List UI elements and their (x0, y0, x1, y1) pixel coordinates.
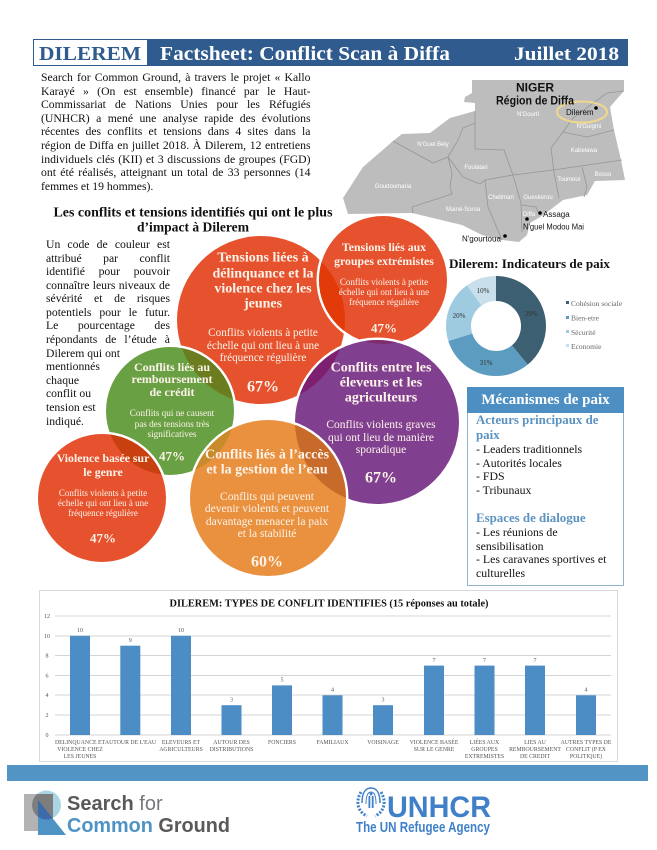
category labels: AUTRES TYPES DE (561, 740, 612, 746)
bubble: éleveurs et agriculteurs: agriculteurs (345, 390, 418, 406)
bubble: accès et gestion de l'eau: et la stabilité (238, 528, 296, 540)
colour code explanation text: répondants de l’étude à (46, 333, 170, 346)
panel text: Acteurs principaux de (476, 413, 598, 427)
bubble: accès et gestion de l'eau: et la gestion de l’eau (206, 462, 328, 478)
intro paragraph: Karayé » (On est ensemble) financé par le Haut- (41, 85, 310, 98)
logo: Search for Common Ground (24, 790, 229, 835)
bubble: groupes extrémistes: Conflits violents à petite (340, 277, 428, 287)
category labels: SUR LE GENRE (414, 747, 455, 753)
colour code explanation text: tension est (46, 401, 96, 414)
bubble: remboursement de crédit: de crédit (150, 385, 194, 399)
colour code explanation text: indiqué. (46, 415, 84, 428)
panel text: paix (476, 428, 500, 442)
intro paragraph: région de Diffa en juillet 2018. À Dilerem, 12 entretiens (41, 139, 310, 152)
bar values: 9 (129, 638, 132, 644)
category labels: LIES AU (524, 740, 547, 746)
panel text: sensibilisation (476, 539, 544, 553)
bubble: éleveurs et agriculteurs: Conflits entre les (331, 360, 432, 376)
category labels: REMBOURSEMENT (509, 747, 561, 753)
bar values: 7 (432, 658, 436, 664)
logo: UNHCR: UNHCR (387, 791, 491, 824)
intro paragraph (41, 71, 310, 193)
category labels: FONCIERS (268, 740, 296, 746)
donut values: 10% (477, 287, 490, 295)
colour code explanation text: attribué par conflit (46, 252, 170, 265)
bubble: délinquance: délinquance et la (212, 266, 314, 282)
donut heading: Dilerem: Indicateurs de paix (449, 256, 611, 271)
panel text: - Les réunions de (476, 525, 558, 539)
map of Diffa region: Région de Diffa (496, 94, 574, 108)
panel text: - Leaders traditionnels (476, 442, 582, 456)
y axis labels: 8 (46, 654, 48, 660)
panel text: culturelles (476, 566, 525, 580)
y axis labels: 10 (44, 634, 50, 640)
bubble: éleveurs et agriculteurs: éleveurs et les (340, 376, 423, 390)
category labels: CONFLIT (P EX (566, 746, 607, 753)
map of Diffa region: Foulatari (464, 165, 488, 171)
donut segments (458, 288, 534, 364)
map of Diffa region: Goudoumaria (375, 184, 412, 190)
category labels: VIOLENCE CHEZ (57, 747, 103, 753)
bubble: violence basée sur le genre (36, 432, 168, 564)
donut legend: Economie (571, 342, 602, 351)
bubble: accès et gestion de l'eau: 60% (251, 554, 283, 570)
bubble: éleveurs et agriculteurs: sporadique (356, 444, 406, 456)
bar values: 3 (230, 698, 233, 704)
section heading: conflicts: Les conflits et tensions identifiés qui ont le plus (54, 206, 333, 220)
header banner: Juillet 2018 (514, 44, 619, 65)
map of Diffa region (343, 80, 625, 244)
bubble: éleveurs et agriculteurs: Conflits violents graves (326, 419, 436, 431)
colour code explanation text: sévérité et de risques (46, 292, 170, 305)
donut legend (566, 299, 623, 351)
colour code explanation text: Le pourcentage des (46, 319, 170, 332)
bubble: délinquance: jeunes (243, 296, 283, 312)
bubble: accès et gestion de l'eau: Conflits liés à l’accès (205, 448, 330, 462)
bubble: remboursement de crédit (104, 344, 236, 478)
bubble: violence basée sur le genre: fréquence régulière (68, 508, 138, 518)
category labels: AUTOUR DE L'EAU (105, 740, 157, 746)
donut legend: Sécurité (571, 328, 596, 337)
header banner (33, 39, 628, 66)
intro paragraph: ont été réalisés, atteignant un total de 33 personnes (14 (41, 166, 310, 179)
bar values: 4 (331, 688, 334, 694)
category labels: FAMILIAUX (316, 740, 349, 746)
donut values: 39% (525, 310, 538, 318)
bubble: violence basée sur le genre: le genre (83, 465, 123, 479)
bubble: accès et gestion de l'eau: Conflits qui peuvent (220, 491, 315, 503)
panel text: - FDS (476, 469, 505, 483)
bubble cluster (38, 216, 459, 576)
header banner: Factsheet: Conflict Scan à Diffa (160, 43, 450, 65)
donut values: 20% (453, 312, 466, 320)
category labels: ELEVEURS ET (162, 740, 201, 746)
map of Diffa region: N'Guel Bely (417, 142, 449, 148)
bubble: délinquance: fréquence régulière (220, 352, 306, 364)
bar values: 10 (77, 628, 83, 634)
intro paragraph: (UNHCR) a mené une analyse rapide des évolutions (41, 112, 310, 125)
bar values: 7 (483, 658, 486, 664)
bubble: remboursement de crédit: 47% (159, 448, 185, 464)
logo: Search for Common Ground: Common Ground (67, 815, 230, 837)
bubble: groupes extrémistes: Tensions liés aux (342, 240, 426, 254)
y axis labels: 4 (46, 693, 48, 699)
bubble: éleveurs et agriculteurs: qui ont lieu de manière (328, 432, 434, 444)
category labels: VOISINAGE (367, 740, 399, 746)
bubble: éleveurs et agriculteurs (292, 338, 462, 506)
category labels: DELINQUANCE ET (55, 740, 105, 746)
map of Diffa region: NIGER (516, 80, 554, 94)
intro paragraph: Search for Common Ground, à travers le projet « Kallo (41, 71, 310, 84)
panel heading (467, 387, 624, 413)
bubble: violence basée sur le genre: Violence basée sur (57, 451, 149, 465)
category labels: AUTOUR DES (213, 740, 250, 746)
colour code explanation text: conflit ou (46, 387, 91, 400)
y axis labels: 0 (46, 733, 48, 739)
map of Diffa region: N'Guigmi (577, 124, 601, 130)
bubble: groupes extrémistes: 47% (371, 320, 397, 336)
bubble: remboursement de crédit: Conflits liés au (134, 360, 210, 374)
category labels: AGRICULTEURS (159, 747, 203, 753)
map of Diffa region: Mainé-Soroa (446, 207, 481, 213)
category labels: GROUPES (471, 747, 498, 753)
category labels (55, 738, 612, 760)
map of Diffa region: Chetimari (488, 195, 514, 201)
colour code explanation text: Un code de couleur est (46, 238, 170, 251)
category labels: VIOLENCE BASÉE (410, 738, 459, 746)
donut legend: Bien-etre (571, 314, 600, 322)
colour code explanation text: chaque (46, 374, 79, 387)
bubble: groupes extrémistes: groupes extrémistes (334, 254, 434, 268)
map of Diffa region: Diffa (523, 212, 536, 218)
bubble: délinquance: violence chez les (214, 282, 312, 296)
panel text: - Tribunaux (476, 483, 531, 497)
bubble: accès et gestion de l'eau: davantage menacer la paix (206, 516, 328, 528)
bar values: 5 (280, 678, 284, 684)
bars (70, 636, 596, 735)
y axis labels: 6 (46, 674, 48, 680)
map of Diffa region: N'guel Modou Mai (523, 222, 584, 232)
bar values: 3 (382, 698, 384, 704)
bubble: délinquance: Conflits violents à petite (208, 327, 318, 339)
y axis labels: 2 (46, 713, 48, 719)
colour code explanation text: potentiels pour le futur. (46, 306, 170, 319)
map of Diffa region: Kabelawa (571, 148, 598, 154)
panel text: Espaces de dialogue (476, 511, 586, 525)
panel heading: Mécanismes de paix (481, 392, 610, 408)
bubble: groupes extrémistes: fréquence régulière (349, 297, 419, 307)
map of Diffa region: Toumour (557, 177, 581, 183)
y axis labels: 12 (44, 614, 50, 620)
intro paragraph: femmes et 19 hommes). (41, 180, 153, 193)
y axis labels (44, 614, 50, 739)
bubble: violence basée sur le genre: 47% (90, 530, 116, 546)
bubble: délinquance: échelle qui ont lieu à une (207, 340, 319, 352)
colour code explanation text: Dilerem qui ont (46, 347, 120, 360)
donut chart: indicateurs de paix (446, 256, 623, 376)
bubble: délinquance: Tensions liées à (217, 250, 309, 266)
panel text: - Autorités locales (476, 456, 562, 470)
intro paragraph: individuels clés (KII) et 3 discussions de groupes (FGD) (41, 153, 310, 166)
bubble: groupes extrémistes: échelle qui ont lieu à une (339, 287, 429, 297)
donut values: 31% (480, 359, 493, 367)
category labels: POLITIQUE) (570, 753, 602, 760)
bar values: 4 (584, 688, 588, 694)
logo: UNHCR: The UN Refugee Agency (356, 819, 490, 836)
bubble: accès et gestion de l'eau: devenir violents et peuvent (205, 503, 330, 515)
bubble: remboursement de crédit: remboursement (131, 372, 213, 386)
section heading: conflicts (54, 206, 333, 236)
colour code explanation text: connaître leurs niveaux de (46, 279, 170, 292)
colour code explanation text: mentionnés (46, 360, 100, 373)
map of Diffa region: N'gourtoua (462, 234, 501, 244)
panel: mécanismes de paix (467, 387, 624, 586)
bar values (77, 628, 588, 704)
logo: Search for Common Ground: Search for (67, 793, 163, 815)
colour code explanation text: identifié pour pouvoir (46, 265, 170, 278)
panel text (476, 413, 606, 580)
bubble: remboursement de crédit: pas des tensions très (135, 419, 210, 429)
emblem (358, 788, 384, 816)
bubble: délinquance (177, 236, 345, 404)
category labels: LIÉES AUX (470, 738, 500, 746)
map of Diffa region: N'Gourti (517, 112, 539, 118)
category labels: DE CREDIT (520, 754, 551, 760)
footer band (7, 765, 648, 781)
intro paragraph: Commissariat de Nations Unies pour les Réfugiés (41, 98, 310, 111)
donut values (453, 287, 538, 367)
bubble: délinquance: 67% (247, 378, 279, 396)
map of Diffa region: Assaga (543, 210, 570, 219)
bar values: 7 (534, 658, 536, 664)
map of Diffa region: Gueskerou (523, 195, 553, 201)
panel text: - Les caravanes sportives et (476, 552, 606, 566)
section heading: conflicts: d’impact à Dilerem (137, 220, 249, 236)
bubble: violence basée sur le genre: Conflits violents à petite (59, 488, 147, 498)
map of Diffa region: Bosso (595, 172, 612, 178)
bubble: groupes extrémistes (316, 214, 450, 346)
category labels: DISTRIBUTIONS (210, 747, 253, 753)
map of Diffa region: Dilerem (566, 108, 594, 117)
intro paragraph: récentes des conflits et tensions dans 4 sites dans la (41, 125, 310, 138)
donut legend: Cohésion sociale (571, 299, 623, 308)
bubble: violence basée sur le genre: échelle qui ont lieu à une (58, 498, 148, 508)
bubble: éleveurs et agriculteurs: 67% (365, 470, 397, 486)
category labels: EXTREMISTES (465, 754, 504, 760)
bubble: accès et gestion de l'eau (188, 418, 348, 578)
category labels: LES JEUNES (64, 754, 96, 760)
bubble: remboursement de crédit: significatives (148, 429, 197, 439)
header banner: DILEREM (39, 43, 141, 65)
colour code explanation text (46, 238, 170, 428)
bar values: 10 (178, 628, 184, 634)
chart title: DILEREM: TYPES DE CONFLIT IDENTIFIES (15 réponses au totale) (170, 598, 488, 610)
bubble: remboursement de crédit: Conflits qui ne causent (130, 408, 215, 418)
